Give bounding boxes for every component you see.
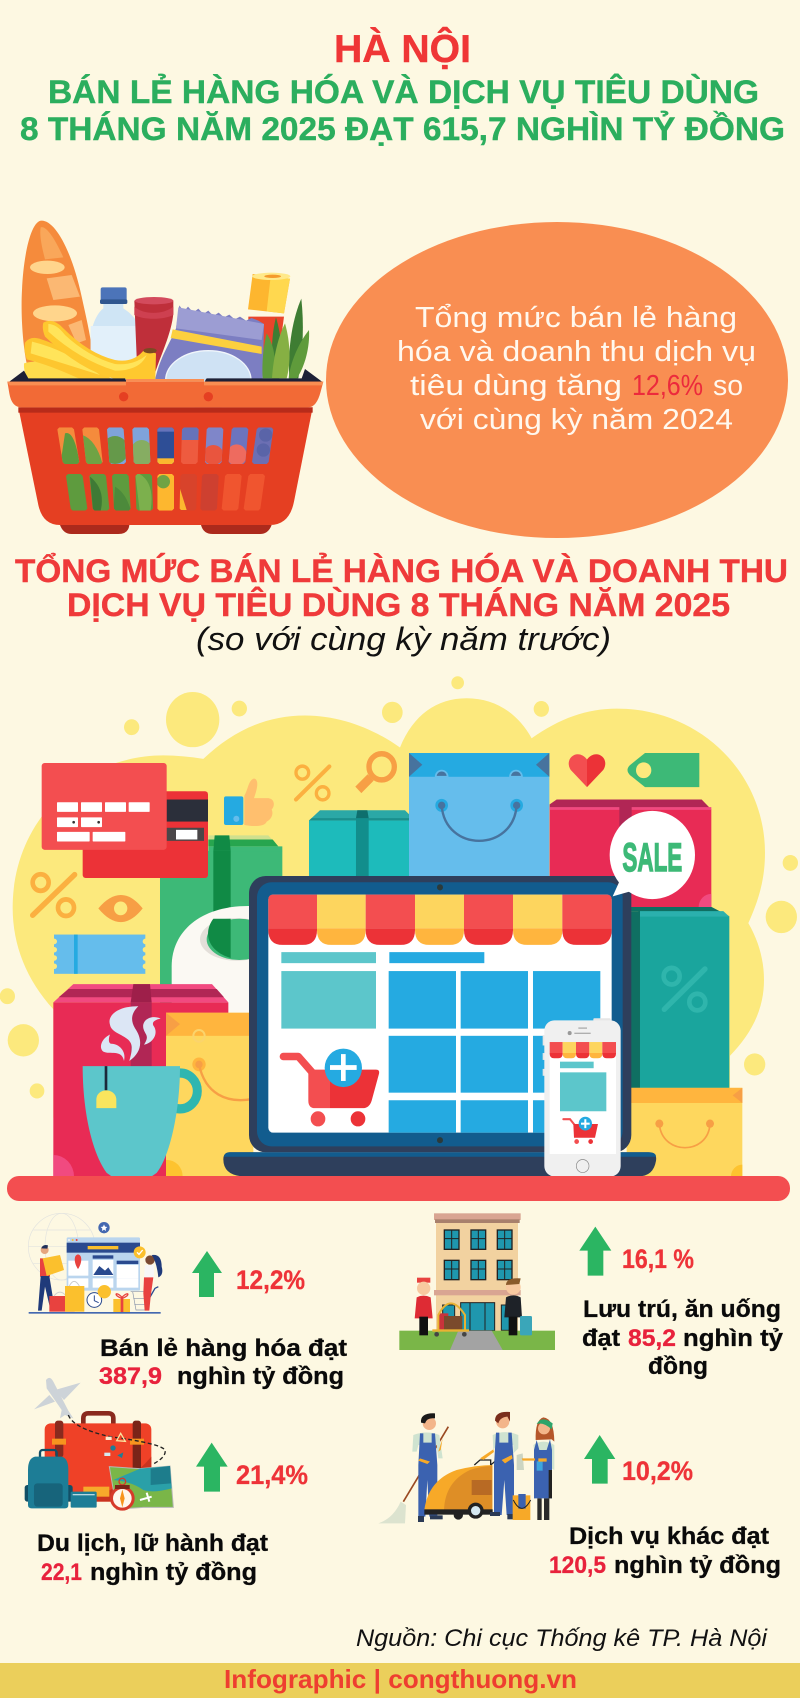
pink gift box left [53, 984, 228, 1176]
icon: thumbs up [224, 779, 274, 826]
source note: Nguồn: Chi cục Thống kê TP. Hà Nội [356, 1625, 768, 1652]
callout text [397, 302, 756, 436]
footer band [0, 1663, 800, 1698]
credit card front [42, 763, 167, 850]
store page blocks [281, 952, 600, 1133]
green box [160, 835, 282, 1023]
icon: heart [569, 754, 605, 787]
callout: orange ellipse with total growth [326, 222, 788, 538]
basket rim dark handles [9, 369, 322, 385]
shop awning [268, 895, 612, 945]
blue shopping bag [409, 753, 549, 877]
accommodation description: nghìn tỷ [683, 1325, 784, 1352]
laptop [249, 876, 631, 1152]
pink gift box right [550, 800, 712, 907]
panel: tourism [25, 1378, 308, 1586]
bananas [24, 321, 157, 379]
sale label: SALE [622, 836, 682, 880]
other services description: nghìn tỷ đồng [614, 1552, 781, 1579]
teal box right [630, 907, 729, 1089]
icon: cart with plus [283, 1049, 379, 1126]
smartphone [543, 1018, 621, 1176]
other services description [549, 1523, 781, 1579]
tourism description: 22,1 [41, 1559, 82, 1586]
arrow up [579, 1227, 611, 1276]
percent: 21,4% [236, 1460, 308, 1490]
yellow bag right [626, 1088, 742, 1176]
snack packet [155, 305, 264, 409]
illustration: online shopping scene [0, 676, 798, 1198]
icon: ticket [52, 935, 148, 974]
arrow up [196, 1443, 228, 1492]
yellow cloud background [13, 698, 765, 1118]
accommodation description [582, 1296, 784, 1380]
red shelf bar [7, 1176, 790, 1201]
heading line 1: TỔNG MỨC BÁN LẺ HÀNG HÓA VÀ DOANH THU [15, 553, 788, 589]
callout text: tiêu dùng tăng [410, 370, 622, 402]
steam [101, 1006, 161, 1061]
green leaves [262, 299, 309, 378]
icon: cleaning staff [378, 1412, 554, 1523]
teal gift box [309, 810, 416, 879]
icon: eye [98, 895, 143, 922]
panel: accommodation and food [399, 1213, 784, 1380]
callout text: với cùng kỳ năm 2024 [420, 404, 733, 436]
red can [134, 297, 173, 373]
other services description: Dịch vụ khác đạt [569, 1523, 769, 1550]
heading line 2: DỊCH VỤ TIÊU DÙNG 8 THÁNG NĂM 2025 [67, 587, 730, 623]
title: Hà Nội: HÀ NỘI [334, 26, 471, 71]
callout text: Tổng mức bán lẻ hàng [415, 302, 737, 334]
subtitle line 2: 8 THÁNG NĂM 2025 ĐẠT 615,7 NGHÌN TỶ ĐỒNG [20, 111, 785, 147]
bread [22, 221, 92, 363]
tourism description: nghìn tỷ đồng [90, 1559, 257, 1586]
percent: 12,2% [236, 1265, 305, 1295]
accommodation description: Lưu trú, ăn uống [583, 1296, 781, 1323]
title block [20, 26, 785, 147]
retail description [99, 1335, 347, 1390]
decorative dots [0, 676, 798, 1099]
percent: 10,2% [622, 1456, 693, 1486]
retail description: nghìn tỷ đồng [177, 1363, 344, 1390]
tourism description: Du lịch, lữ hành đạt [37, 1530, 268, 1557]
arrow up [584, 1435, 615, 1484]
icon: percent orange small [296, 766, 329, 800]
credit card back [83, 791, 208, 878]
yellow tube [248, 273, 290, 373]
panel: retail [28, 1213, 347, 1390]
water bottle [91, 287, 145, 380]
icon: percent large [33, 874, 75, 916]
icon: shopping basket with groceries [7, 221, 323, 534]
callout text: so [713, 370, 743, 402]
arrow up [192, 1251, 222, 1297]
footer text: Infographic | congthuong.vn [224, 1664, 577, 1694]
sale speech bubble [610, 811, 695, 899]
subtitle line 1: BÁN LẺ HÀNG HÓA VÀ DỊCH VỤ TIÊU DÙNG [48, 74, 759, 110]
callout text: hóa và doanh thu dịch vụ [397, 336, 756, 368]
icon: hotel [399, 1213, 555, 1350]
accommodation description: đồng [648, 1353, 708, 1380]
laptop base [223, 1152, 656, 1176]
white bag [172, 906, 273, 1014]
icon: magnifier [358, 754, 394, 790]
mug [83, 1066, 197, 1176]
accommodation description: 85,2 [628, 1325, 676, 1352]
icon: online retail [28, 1213, 162, 1314]
basket slots upper row [58, 427, 274, 464]
yellow bag left [166, 1012, 254, 1176]
retail description: 387,9 [99, 1363, 162, 1390]
panel: other services [378, 1412, 781, 1579]
accommodation description: đạt [582, 1325, 620, 1352]
callout text: 12,6% [632, 370, 703, 402]
retail description: Bán lẻ hàng hóa đạt [100, 1335, 347, 1362]
percent: 16,1 % [622, 1244, 694, 1274]
icon: travel suitcase [25, 1378, 173, 1511]
icon: price tag [627, 753, 699, 787]
basket slots lower row [66, 474, 265, 511]
heading note: (so với cùng kỳ năm trước) [196, 621, 611, 657]
other services description: 120,5 [549, 1552, 606, 1579]
section heading [15, 553, 788, 657]
basket body [7, 379, 323, 534]
tourism description [37, 1530, 268, 1586]
